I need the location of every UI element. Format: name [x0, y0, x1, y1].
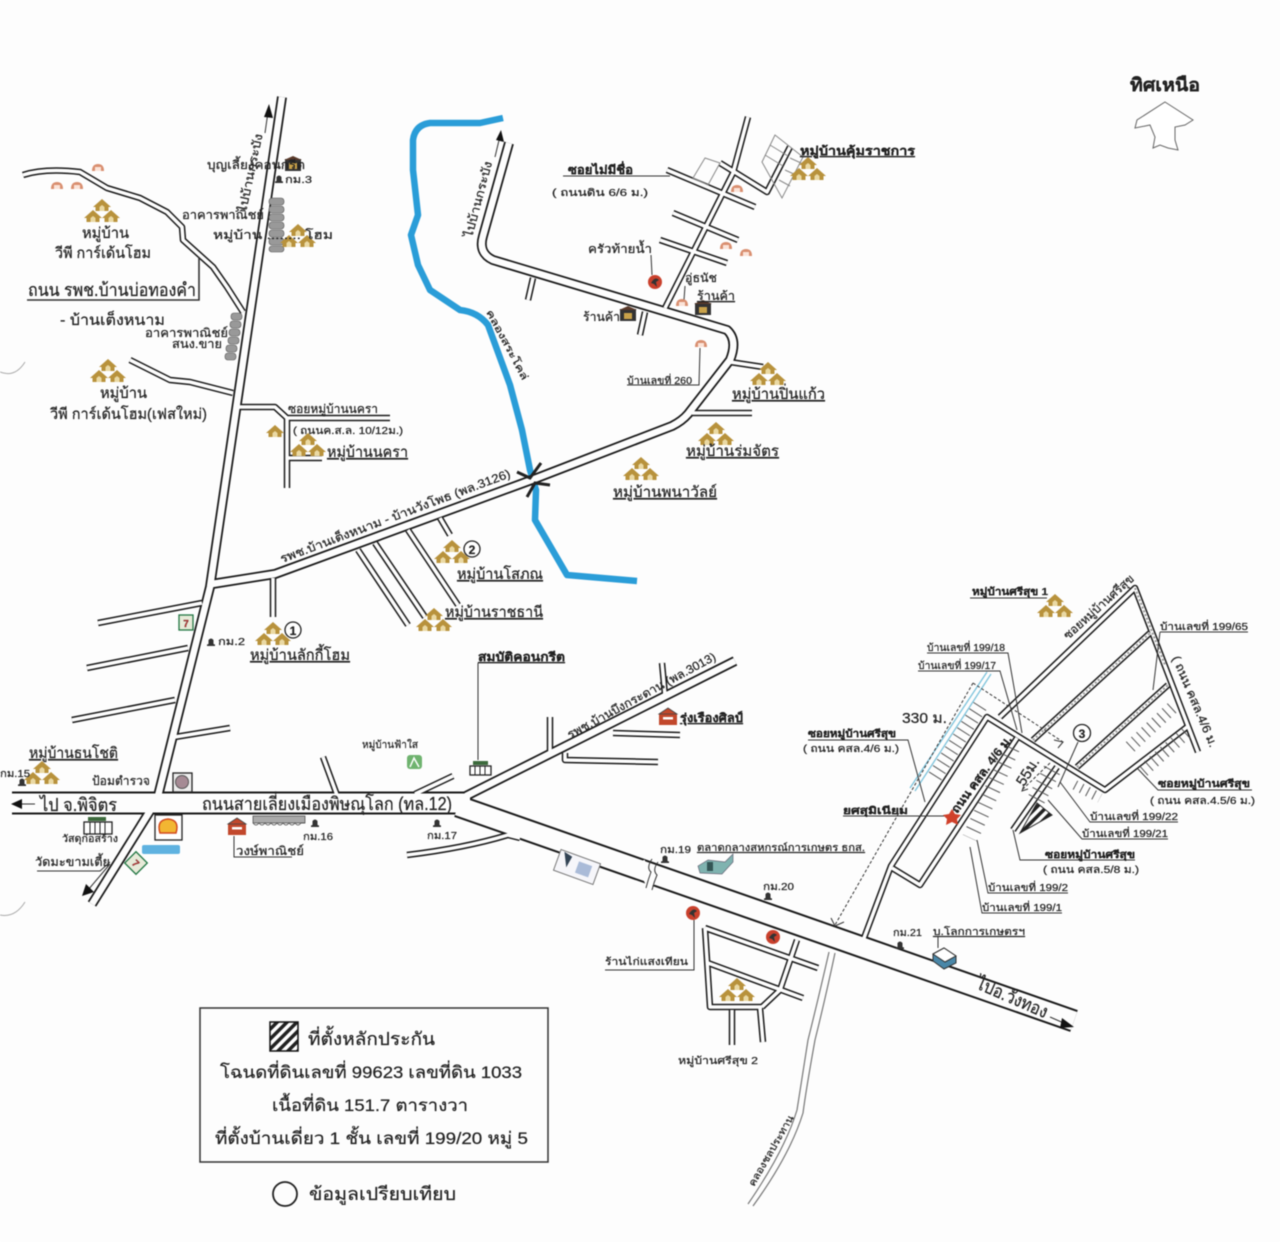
labels north-west: บุญเลี้ยงคอนกรีต: [207, 156, 305, 173]
legend comparison key: ข้อมูลเปรียบเทียบ: [309, 1184, 456, 1205]
labels south-west: วัสดุก่อสร้าง: [62, 833, 118, 845]
labels south-west: กม.17: [427, 831, 457, 842]
small house icons: [51, 164, 752, 347]
labels north-west: กม.3: [285, 175, 313, 186]
labels south-west: สมบัติคอนกรีต: [478, 650, 565, 664]
icon: blue sign: [142, 845, 180, 854]
punch hole mark top: [0, 362, 25, 374]
labels south-east: บ้านเลขที่ 199/18: [927, 640, 1005, 654]
labels south-east: หมู่บ้านศรีสุข 2: [678, 1055, 759, 1067]
compare point 2: 2: [469, 543, 476, 557]
icon: 7-eleven south: [125, 852, 147, 874]
labels south-east: ( ถนน คสล.5/8 ม.): [1043, 865, 1139, 876]
rotated road labels and direction arrows: ซอยหมู่บ้านศรีสุข: [1061, 572, 1138, 643]
labels north-centre: หมู่บ้านร่มจัตร: [686, 443, 779, 460]
red shop icons: [228, 708, 677, 835]
icon: market building: [698, 854, 733, 874]
arrow to wat: [82, 864, 110, 896]
labels north-west: หมู่บ้านนครา: [327, 444, 408, 461]
labels south-east: ตลาดกลางสหกรณ์การเกษตร ธกส.: [697, 842, 865, 854]
compare point 3: 3: [1079, 727, 1086, 741]
labels south-east: ยศสุมิเนียม: [843, 805, 908, 817]
north arrow: [1135, 102, 1193, 150]
labels south-west: หมู่บ้านธนโชติ: [29, 744, 118, 762]
labels south-east: บ้านเลขที่ 199/1: [982, 900, 1063, 914]
river: [411, 118, 637, 581]
labels north-centre: หมู่บ้านคุ้มราชการ: [800, 144, 916, 159]
lot strips in Srisuk estate: [934, 706, 1186, 838]
legend line location: ที่ตั้งบ้านเดี่ยว 1 ชั้น เลขที่ 199/20 หมู่ 5: [215, 1126, 528, 1149]
labels north-centre: หมู่บ้านพนาวัลย์: [613, 484, 717, 501]
legend title: ที่ตั้งหลักประกัน: [308, 1026, 435, 1049]
330 m marker: [910, 672, 991, 791]
compare point 1: [285, 622, 301, 638]
icon: agri-shop box: [933, 948, 956, 969]
labels south-east: ซอยหมู่บ้านศรีสุข: [1045, 849, 1135, 862]
legend box: [200, 1008, 548, 1162]
labels north-west: หมู่บ้าน: [82, 225, 129, 242]
rotated road labels and direction arrows: ( ถนน คสล.4/6 ม.: [1169, 654, 1220, 749]
labels south-west: ถนนสายเลี่ยงเมืองพิษณุโลก (ทล.12): [202, 791, 452, 815]
leaders: [27, 176, 1252, 970]
labels north-centre: ร้านค้า: [697, 289, 735, 303]
legend comparison key: [273, 1182, 456, 1206]
rotated road labels and direction arrows: ไปบ้านกระบัง: [235, 132, 266, 215]
shop icons: [284, 156, 712, 321]
rotated road labels and direction arrows: [235, 104, 1220, 1188]
labels south-west: กม.15: [0, 769, 30, 780]
rotated road labels and direction arrows: รพช.บ้านเต็งหนาม - บ้านวังโพธ (พล.3126): [278, 466, 512, 566]
labels south-east: กม.21: [893, 928, 922, 939]
labels south-west: วัดมะขามเตี้ย: [35, 853, 110, 869]
rotated road labels and direction arrows: ไปอ.วังทอง: [972, 972, 1051, 1022]
labels north-west: - บ้านเต็งหนาม: [60, 310, 165, 329]
labels north-centre: บ้านเลขที่ 260: [627, 373, 692, 387]
labels north-centre: [250, 144, 916, 664]
north label: ทิศเหนือ: [1130, 75, 1200, 95]
rotated road labels and direction arrows: ไปบ้านกระบัง: [461, 160, 495, 240]
labels south-east: ( ถนน คสล.4/6 ม.): [803, 744, 899, 755]
labels south-west: รุ่งเรืองศิลป์: [680, 711, 743, 726]
village icons: [24, 157, 1073, 1001]
icon: roadside sign: [554, 849, 600, 885]
labels south-west: กม.16: [303, 832, 333, 843]
labels north-west: [28, 156, 408, 461]
road surfaces: [12, 97, 1198, 1045]
labels south-west: กม.2: [218, 637, 246, 648]
compare point 1: 1: [290, 624, 297, 638]
labels south-west: หมู่บ้านฟ้าใส: [362, 739, 418, 751]
collateral plot hatched: [1020, 803, 1052, 833]
labels south-east: บ้านเลขที่ 199/22: [1090, 809, 1179, 823]
labels north-centre: หมู่บ้านโสภณ: [457, 565, 543, 583]
house lots north: [693, 135, 803, 198]
labels north-west: ซอยหมู่บ้านนครา: [288, 402, 378, 417]
labels south-east: 330 ม.: [902, 710, 947, 727]
labels north-centre: ซอยไม่มีชื่อ: [568, 161, 633, 177]
bridge mark: [517, 463, 550, 497]
labels south-east: กม.20: [763, 882, 794, 893]
icon: 7-eleven south: 7: [129, 858, 141, 870]
restaurant icons: [648, 275, 780, 944]
labels north-west: หมู่บ้าน: [100, 385, 147, 402]
labels south-east: บ.โลกการเกษตรฯ: [933, 925, 1025, 938]
labels north-west: สนง.ขาย: [172, 337, 222, 351]
labels north-centre: ( ถนนดิน 6/6 ม.): [552, 188, 648, 199]
labels south-west: ไป จ.พิจิตร: [38, 794, 117, 815]
labels north-centre: หมู่บ้านลักกี้โฮม: [250, 644, 350, 664]
labels north-centre: อู่ธนัช: [685, 271, 717, 286]
icon: green village: [407, 755, 422, 769]
labels north-centre: ร้านค้า: [583, 310, 620, 324]
labels south-east: ( ถนน คสล.4.5/6 ม.): [1150, 796, 1255, 807]
labels south-east: บ้านเลขที่ 199/65: [1160, 619, 1249, 633]
labels south-west: วงษ์พาณิชย์: [236, 844, 304, 858]
labels north-west: ( ถนนค.ส.ล. 10/12ม.): [293, 426, 403, 437]
labels north-centre: ครัวท้ายน้ำ: [588, 240, 652, 256]
labels south-east: ซอยหมู่บ้านศรีสุข: [1158, 778, 1250, 791]
textured roads in estate: [1033, 588, 1168, 767]
compare point 3: [1058, 724, 1090, 787]
punch hole mark bottom: [0, 902, 25, 915]
icon: police box: [173, 773, 192, 792]
rotated road labels and direction arrows: คลองชลประทาน: [747, 1114, 797, 1188]
road break mark: [640, 859, 658, 890]
icon: concrete store: [470, 761, 491, 775]
road casings: [12, 97, 1198, 1045]
rotated road labels and direction arrows: รพช.บ้านบึงกระดาน (พล.3013): [565, 650, 718, 742]
icon: material shop: [84, 817, 112, 834]
labels south-west: [0, 637, 743, 869]
road network: [12, 97, 1198, 1045]
labels north-west: อาคารพาณิชย์: [182, 208, 264, 222]
km markers: [18, 176, 904, 949]
canal east: [748, 952, 835, 1206]
dashed route arrows: [835, 683, 1063, 925]
rotated road labels and direction arrows: ถนน คสล. 4/6 ม.: [948, 733, 1015, 816]
arrowheads: [831, 740, 1063, 926]
labels south-east: หมู่บ้านศรีสุข 1: [972, 586, 1049, 599]
labels south-east: บ้านเลขที่ 199/2: [988, 880, 1069, 894]
building rows on main road: [225, 198, 284, 360]
labels north-west: วีพี การ์เด้นโฮม: [54, 244, 151, 262]
icon: shop row on bypass: [253, 816, 305, 825]
icon: 7-eleven north: [179, 615, 193, 630]
labels north-west: ถนน รพช.บ้านบ่อทองคำ: [28, 280, 196, 300]
legend line area: เนื้อที่ดิน 151.7 ตารางวา: [272, 1093, 468, 1115]
labels north-west: วีพี การ์เด้นโฮม(เฟสใหม่): [49, 405, 207, 423]
legend hatch swatch: [270, 1022, 298, 1051]
labels north-centre: หมู่บ้านปิ่นแก้ว: [732, 383, 825, 403]
red star icon: [943, 809, 961, 825]
rotated road labels and direction arrows: คลองสระโคล่: [483, 307, 531, 382]
rotated road labels and direction arrows: 55ม.: [1013, 755, 1043, 789]
labels south-east: ซอยหมู่บ้านศรีสุข: [808, 728, 896, 741]
labels north-west: อาคารพาณิชย์: [145, 326, 228, 340]
labels north-west: หมู่บ้าน ........ โฮม: [213, 228, 333, 243]
labels south-east: บ้านเลขที่ 199/21: [1082, 826, 1168, 840]
icon: 7-eleven north: 7: [183, 619, 189, 630]
labels north-centre: หมู่บ้านราชธานี: [445, 604, 543, 621]
compare point 2: [464, 541, 480, 557]
labels south-west: ป้อมตำรวจ: [92, 774, 150, 788]
icon: shell: [155, 815, 182, 840]
labels south-east: [605, 586, 1255, 1067]
labels south-east: ร้านไก่แสงเทียน: [605, 956, 688, 968]
labels south-east: บ้านเลขที่ 199/17: [918, 658, 996, 672]
labels south-east: กม.19: [660, 845, 691, 856]
arrow to Phichit: [11, 799, 35, 809]
legend line deed: โฉนดที่ดินเลขที่ 99623 เลขที่ดิน 1033: [220, 1060, 522, 1082]
